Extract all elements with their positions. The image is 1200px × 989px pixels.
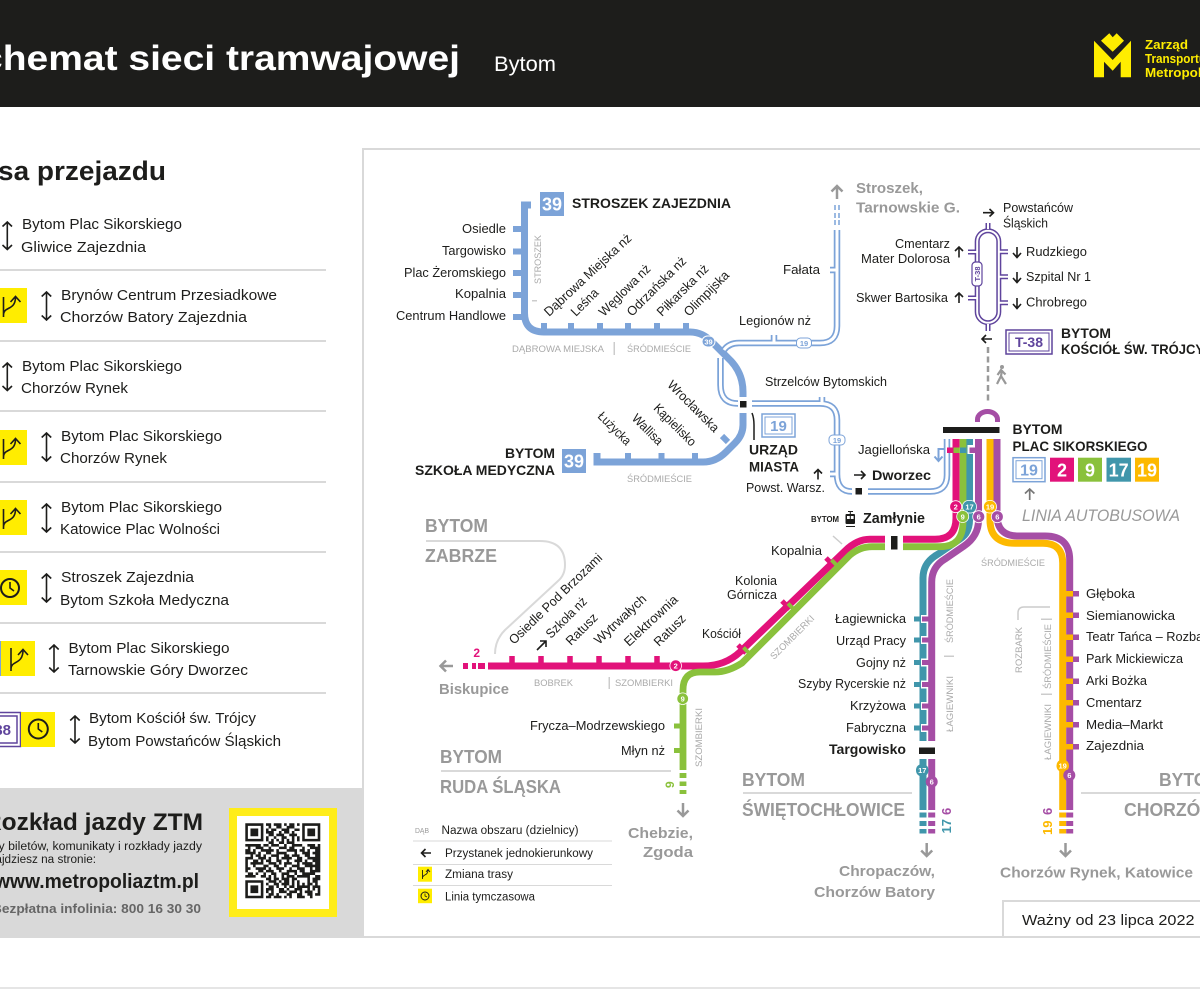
legend: Linia tymczasowa xyxy=(445,892,536,904)
end-of-line numbers: 2 xyxy=(473,646,480,660)
district labels: south: BOBREK xyxy=(534,678,574,689)
region label: Bytom / Świętochłowice: ŚWIĘTOCHŁOWICE xyxy=(742,799,905,820)
district labels: south: SZOMBIERKI xyxy=(768,613,817,662)
district labels: south: ŁAGIEWNIKI xyxy=(945,676,956,732)
stop: Dworzec: Dworzec xyxy=(872,467,931,483)
stops: line 39 diagonal south: Wallisa xyxy=(629,411,667,449)
line number markers: 9 xyxy=(961,512,965,521)
website url: www.metropoliaztm.pl xyxy=(0,871,199,893)
route row 3: Chorzów Rynek xyxy=(21,380,129,397)
route row 5: Bytom Plac Sikorskiego xyxy=(61,499,222,516)
stops: Targowisko branch: Krzyżowa xyxy=(850,698,907,713)
district labels: south: ŁAGIEWNIKI xyxy=(1043,704,1054,760)
district labels: south xyxy=(534,536,1054,767)
interchange stubs xyxy=(947,448,954,453)
end-of-line numbers: 17 xyxy=(939,819,954,834)
stops: south branch: Głęboka xyxy=(1086,586,1136,601)
stops: south branch: Media–Markt xyxy=(1086,717,1163,732)
stop labels: line 19: Powst. Warsz. xyxy=(746,480,825,495)
destination: Stroszek, Tarnowskie G.: Tarnowskie G. xyxy=(856,200,960,216)
line number markers: 19 xyxy=(986,502,994,512)
stop labels: T-38: Mater Dolorosa xyxy=(861,251,951,266)
stops: Targowisko branch xyxy=(798,611,929,735)
region label: Bytom / Chorzów xyxy=(1081,770,1200,820)
QR code xyxy=(229,808,337,917)
stops: line 39 diagonal north: Leśna xyxy=(568,285,602,319)
destination: Chropaczów, Chorzów Batory: Chropaczów, xyxy=(839,863,935,880)
destination: Stroszek, Tarnowskie G.: Stroszek, xyxy=(856,180,923,197)
walking connection xyxy=(988,347,1006,403)
line badges at hub: 2 xyxy=(1057,460,1067,480)
stop: Bytom Plac Sikorskiego: LINIA AUTOBUSOWA xyxy=(1022,506,1180,525)
line number markers xyxy=(670,500,1075,788)
panel: timetable info and QR xyxy=(0,788,364,938)
line number markers: 19 xyxy=(1059,762,1067,770)
stops: Targowisko branch: Gojny nż xyxy=(856,655,906,670)
line number marker 39: 39 xyxy=(704,337,713,346)
stops: Targowisko branch: Szyby Rycerskie nż xyxy=(798,676,906,691)
stops: line 39 diagonal south: Kąpielisko xyxy=(651,400,699,449)
marker T-38: T-38 xyxy=(973,266,982,282)
route row 4 xyxy=(0,428,222,467)
line 9 xyxy=(674,439,963,794)
line number marker 19 (south): 19 xyxy=(833,436,841,445)
stops: line 39 diagonal north: Węglowa nż xyxy=(596,261,653,319)
stops: line 9: Młyn nż xyxy=(621,743,665,758)
route row 6: Bytom Szkoła Medyczna xyxy=(60,592,230,609)
subtitle: city: Bytom xyxy=(494,53,556,76)
stops: line 39 diagonal north xyxy=(541,230,733,319)
destination: Biskupice xyxy=(439,660,509,698)
legend: Nazwa obszaru (dzielnicy) xyxy=(442,825,579,837)
destination: Chebzie, Zgoda: Zgoda xyxy=(643,844,694,861)
panel: route list xyxy=(0,156,326,750)
line number markers: 17 xyxy=(965,502,974,512)
line number markers: 17 xyxy=(918,766,926,775)
route row 5 xyxy=(0,499,222,538)
badge: 39 north terminus: 39 xyxy=(542,194,562,214)
stop labels: T-38: Chrobrego xyxy=(1026,294,1087,310)
stops: line 9 xyxy=(530,718,665,758)
region label: Bytom / Zabrze xyxy=(425,516,565,654)
terminus: Stroszek Zajezdnia: STROSZEK ZAJEZDNIA xyxy=(572,195,731,211)
stops: line 2 diagonal: Wytrwałych xyxy=(591,591,649,647)
stops: south branch: Arki Bożka xyxy=(1086,673,1148,688)
route row 8 xyxy=(0,710,281,750)
stop: Bytom Plac Sikorskiego: BYTOM xyxy=(1012,421,1062,437)
line badges at hub xyxy=(1013,458,1159,482)
line badges at hub: 17 xyxy=(1109,460,1129,480)
stop: Dworzec xyxy=(854,467,931,494)
route row 2 xyxy=(0,287,277,326)
stop: Urząd Miasta: 19 xyxy=(770,418,787,435)
destination: Chebzie, Zgoda: Chebzie, xyxy=(628,825,693,842)
stops: south branch: Siemianowicka xyxy=(1086,608,1176,623)
legend: Przystanek jednokierunkowy xyxy=(445,848,593,860)
destination: Chropaczów, Chorzów Batory xyxy=(814,843,936,901)
stops: line 2 diagonal: Osiedle Pod Brzozami xyxy=(506,550,605,647)
stops: line 2 diagonal: Kopalnia xyxy=(771,543,823,558)
line badges at hub: 19 xyxy=(1137,460,1157,480)
stop: Bytom Plac Sikorskiego: PLAC SIKORSKIEGO xyxy=(1012,438,1148,454)
route row 3 xyxy=(2,358,182,397)
route row 7 xyxy=(0,640,249,679)
destination: Biskupice: Biskupice xyxy=(439,681,509,698)
route row 4: Chorzów Rynek xyxy=(60,450,168,467)
stops: Targowisko branch: Fabryczna xyxy=(846,720,907,735)
end-of-line numbers: 19 xyxy=(1040,821,1055,835)
stop labels: T-38: Skwer Bartosika xyxy=(856,290,949,305)
line number markers: 9 xyxy=(681,694,685,704)
terminus: Bytom Szkoła Medyczna: BYTOM xyxy=(505,445,555,461)
stops: line 39 diagonal south: Łużycka xyxy=(595,409,635,449)
legend: Zmiana trasy xyxy=(445,869,513,881)
destination: Chorzów Rynek, Katowice: Chorzów Rynek, Katowice xyxy=(1000,864,1193,882)
stops: line 39 diagonal south xyxy=(595,377,723,449)
stops: line 39 diagonal north: Dąbrowa Miejska nż xyxy=(541,230,634,319)
region label: Bytom / Zabrze: BYTOM xyxy=(425,516,488,536)
route row 8: Bytom Kościół św. Trójcy xyxy=(89,710,257,727)
stops: line 39 vertical: Targowisko xyxy=(442,243,506,258)
validity note: Ważny od 23 lipca 2022 r. xyxy=(1022,912,1200,929)
lines 6 and 17 to Targowisko xyxy=(923,439,978,834)
panel: network map xyxy=(363,149,1200,937)
line T-38 loop xyxy=(968,223,1008,331)
stops: line 39 diagonal north: Olimpijska xyxy=(681,267,733,319)
line number marker 19 (east): 19 xyxy=(800,339,808,348)
destination: Chropaczów, Chorzów Batory: Chorzów Batory xyxy=(814,884,936,901)
stops: Targowisko branch: Urząd Pracy xyxy=(836,633,906,648)
district labels: line 39: ŚRÓDMIEŚCIE xyxy=(627,343,691,355)
stop labels: T-38: Powstańców xyxy=(1003,200,1074,215)
stops: line 2 diagonal: Elektrownia xyxy=(621,591,681,649)
stops: line 39 vertical: Plac Żeromskiego xyxy=(404,265,506,280)
stop labels: T-38: Szpital Nr 1 xyxy=(1026,269,1091,284)
stops: south branch: Cmentarz xyxy=(1086,695,1142,710)
route row 7: Tarnowskie Góry Dworzec xyxy=(68,662,249,679)
stops: line 2 diagonal: Kościół xyxy=(702,626,741,641)
line number marker 19 (south) xyxy=(829,435,845,445)
badge: 39 south terminus xyxy=(562,449,586,473)
route row 6: Stroszek Zajezdnia xyxy=(61,569,195,586)
line number markers: 6 xyxy=(977,512,981,522)
stop labels: T-38: Śląskich xyxy=(1003,216,1048,230)
lines 19 and 6 south xyxy=(990,439,1070,834)
end-of-line numbers: 9 xyxy=(663,781,677,788)
stops: line 39 vertical: Osiedle xyxy=(462,221,506,236)
icon: walker xyxy=(997,365,1006,384)
terminus: Bytom Szkoła Medyczna xyxy=(415,445,555,478)
stop labels: line 19 xyxy=(739,262,931,495)
district labels: south: ŚRÓDMIEŚCIE xyxy=(981,557,1045,569)
stops: line 39 diagonal south: Wrocławska xyxy=(665,377,723,436)
terminus: Bytom Szkoła Medyczna: SZKOŁA MEDYCZNA xyxy=(415,462,555,478)
region label: Bytom / Świętochłowice xyxy=(742,770,912,820)
stop labels: line 19: Jagiellońska xyxy=(858,442,931,457)
district labels: line 39 xyxy=(512,234,692,485)
route row 6 xyxy=(0,569,230,609)
line 2 xyxy=(463,439,956,666)
district labels: line 39: ŚRÓDMIEŚCIE xyxy=(627,473,692,485)
stop: Targowisko: Targowisko xyxy=(829,741,906,757)
stops: line 2 diagonal: Szkoła nż xyxy=(543,594,590,641)
district labels: line 39: DĄBROWA MIEJSKA xyxy=(512,344,605,355)
stops: line 2 diagonal: Kolonia xyxy=(735,573,778,588)
stops: line 2 diagonal: Górnicza xyxy=(727,587,778,602)
legend xyxy=(413,825,612,904)
district labels: south: ROZBARK xyxy=(1014,626,1025,673)
stops: line 39 vertical xyxy=(396,221,507,323)
route row 1: Gliwice Zajezdnia xyxy=(21,239,147,256)
stop: Urząd Miasta: MIASTA xyxy=(749,458,799,474)
stop labels: T-38: Rudzkiego xyxy=(1026,244,1087,259)
route row 2: Chorzów Batory Zajezdnia xyxy=(60,309,248,326)
stop: Urząd Miasta: URZĄD xyxy=(749,442,798,458)
line number markers: 2 xyxy=(954,502,958,512)
stops: line 2 diagonal xyxy=(506,543,823,650)
stops: south branch xyxy=(1066,586,1200,753)
logo: ZTM xyxy=(1094,33,1200,80)
icon: tram xyxy=(846,512,855,526)
terminus: T-38 Bytom Kościół św. Trójcy xyxy=(1006,325,1200,357)
line 19 xyxy=(720,205,947,492)
stops: line 9: Frycza–Modrzewskiego xyxy=(530,718,665,733)
stops: south branch: Zajezdnia xyxy=(1086,738,1145,753)
stops: line 39 diagonal north: Odrzańska nż xyxy=(624,253,689,319)
destination: Chorzów Rynek, Katowice xyxy=(1000,843,1193,882)
destination: Stroszek, Tarnowskie G. xyxy=(832,180,960,216)
route row 8: Bytom Powstańców Śląskich xyxy=(88,732,281,750)
validity note xyxy=(1003,901,1200,937)
route row 2: Brynów Centrum Przesiadkowe xyxy=(61,287,277,304)
district labels: south: ŚRÓDMIEŚCIE xyxy=(1042,624,1054,689)
line number markers: 6 xyxy=(1067,771,1071,780)
stops: south branch: Park Mickiewicza xyxy=(1086,651,1184,666)
region label: Bytom / Ruda Śląska xyxy=(440,747,671,797)
line badges at hub: 9 xyxy=(1085,460,1095,480)
badge: 39 south terminus: 39 xyxy=(564,452,584,472)
line 39 xyxy=(513,192,743,473)
legend: DĄB xyxy=(415,828,429,835)
stop labels: line 19: Fałata xyxy=(783,262,821,277)
route row 1 xyxy=(2,216,182,256)
line number markers: 6 xyxy=(930,778,934,786)
badge: 39 north terminus xyxy=(540,192,564,216)
district labels: south: SZOMBIERKI xyxy=(694,708,705,767)
route row 7: Bytom Plac Sikorskiego xyxy=(68,640,230,657)
end-of-line numbers: 6 xyxy=(939,808,954,815)
destination: Chebzie, Zgoda xyxy=(628,803,694,861)
end-of-line numbers xyxy=(473,646,1055,835)
stops: line 2 diagonal: Ratusz xyxy=(563,610,601,648)
region label: Bytom / Ruda Śląska: BYTOM xyxy=(440,747,502,767)
line number markers: 2 xyxy=(674,662,678,670)
stop: Urząd Miasta xyxy=(740,401,799,474)
line badges at hub: 19 xyxy=(1020,462,1038,480)
district labels: line 39: STROSZEK xyxy=(533,234,544,284)
stops: line 39 vertical: Kopalnia xyxy=(455,286,507,301)
stop labels: line 19: Legionów nż xyxy=(739,313,811,328)
stop stub: Jagiellońska xyxy=(934,449,945,461)
route row 1: Bytom Plac Sikorskiego xyxy=(22,216,182,233)
region label: Bytom / Zabrze: ZABRZE xyxy=(425,546,497,566)
line number marker 19 (east) xyxy=(796,338,812,348)
logo: ZTM: Zarząd xyxy=(1145,38,1188,52)
stop labels: T-38 xyxy=(856,200,1091,343)
stop: Zamłynie: BYTOM xyxy=(811,515,839,524)
line number markers: 6 xyxy=(995,512,999,522)
terminus: T-38 Bytom Kościół św. Trójcy: T-38 xyxy=(1015,334,1043,350)
header bar xyxy=(0,0,1200,107)
stops: line 2 diagonal: Ratusz xyxy=(651,611,689,649)
stop: Zamłynie xyxy=(811,510,925,553)
district labels: south: ŚRÓDMIEŚCIE xyxy=(944,579,956,643)
terminus: T-38 Bytom Kościół św. Trójcy: BYTOM xyxy=(1061,325,1111,341)
route row 3: Bytom Plac Sikorskiego xyxy=(22,358,182,375)
stop labels: line 19: Strzelców Bytomskich xyxy=(765,374,887,389)
route row 5: Katowice Plac Wolności xyxy=(60,521,220,538)
stops: line 39 vertical: Centrum Handlowe xyxy=(396,308,506,323)
line number marker 39 xyxy=(702,336,715,347)
route row 4: Bytom Plac Sikorskiego xyxy=(61,428,222,445)
stops: Targowisko branch: Łagiewnicka xyxy=(835,611,907,626)
stop: Zamłynie: Zamłynie xyxy=(863,510,925,527)
end-of-line numbers: 6 xyxy=(1040,808,1055,815)
stops: line 39 diagonal north: Piłkarska nż xyxy=(654,261,711,319)
district labels: south: SZOMBIERKI xyxy=(615,678,673,689)
stop labels: T-38: Cmentarz xyxy=(895,236,950,251)
region label: Bytom / Świętochłowice: BYTOM xyxy=(742,770,805,790)
stop: Bytom Plac Sikorskiego xyxy=(943,412,1180,525)
region label: Bytom / Ruda Śląska: RUDA ŚLĄSKA xyxy=(440,776,561,797)
